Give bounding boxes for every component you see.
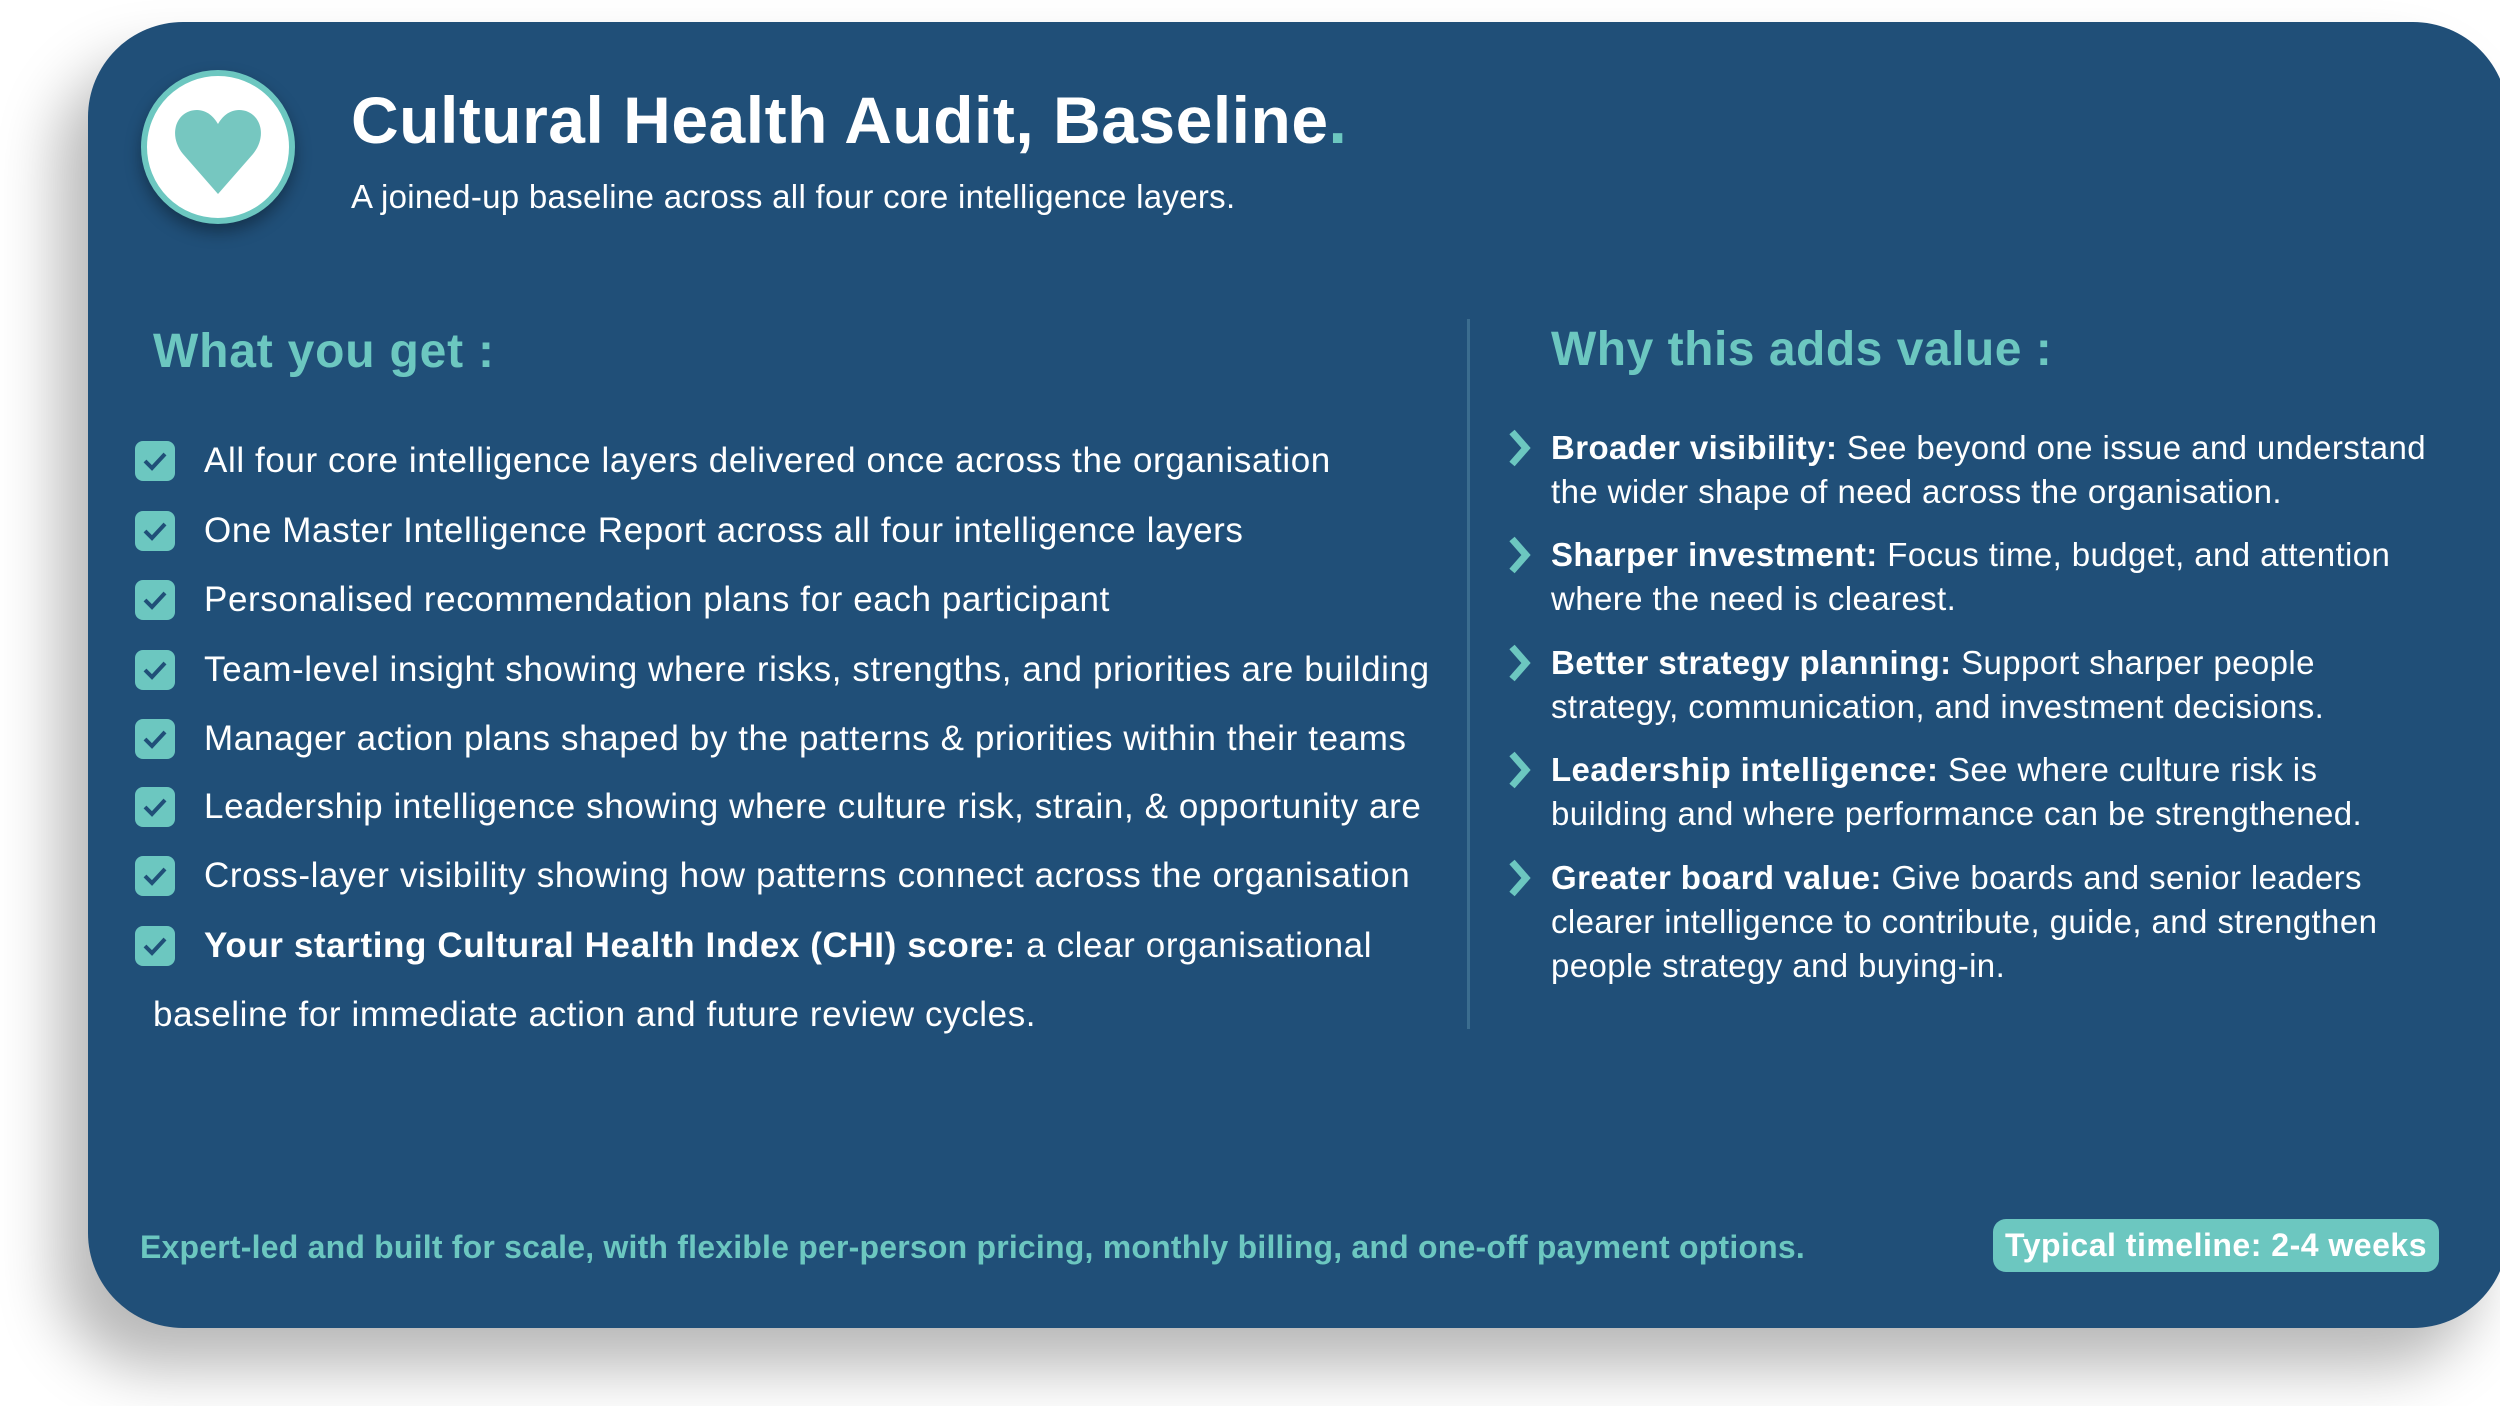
value list: Sharper investment: Focus time, budget, and attention where the need is clearest. xyxy=(1551,536,2390,617)
item 1 xyxy=(135,441,1331,481)
heading: why this adds value: Why this adds value : xyxy=(1551,323,2052,376)
value 4 xyxy=(1510,751,2362,832)
checklist: Team-level insight showing where risks, strengths, and priorities are building xyxy=(204,650,1430,689)
item 4 xyxy=(135,650,1430,690)
value list: Better strategy planning: Support sharper people xyxy=(1551,644,2315,681)
heading: what you get: What you get : xyxy=(153,325,495,378)
badge: timeline: Typical timeline: 2-4 weeks xyxy=(2005,1227,2427,1263)
value 5 xyxy=(1510,859,2377,984)
checklist xyxy=(135,441,1430,1034)
value list: building and where performance can be strengthened. xyxy=(1551,795,2362,832)
checklist: One Master Intelligence Report across all four intelligence layers xyxy=(204,511,1244,550)
value list: Greater board value: Give boards and senior leaders clearer intelligence to contribute, guide, and strengthen people strategy and buying-in. xyxy=(1551,859,2377,984)
checklist: Cross-layer visibility showing how patterns connect across the organisation xyxy=(204,856,1410,895)
title: Cultural Health Audit, Baseline. xyxy=(351,83,1347,157)
value list: Broader visibility: See beyond one issue and understand the wider shape of need across the organisation. xyxy=(1551,429,2426,510)
item 2 xyxy=(135,511,1244,551)
checklist: Your starting Cultural Health Index (CHI) score: a clear organisational xyxy=(204,926,1372,965)
checklist: baseline for immediate action and future review cycles. xyxy=(153,995,1036,1034)
value list xyxy=(1510,429,2426,984)
value list: Leadership intelligence: See where culture risk is xyxy=(1551,751,2317,788)
item 3 xyxy=(135,580,1110,620)
item 8 xyxy=(135,926,1372,1034)
value list: strategy, communication, and investment decisions. xyxy=(1551,688,2324,725)
value 3 xyxy=(1510,644,2324,725)
value 1 xyxy=(1510,429,2426,510)
item 7 xyxy=(135,856,1410,896)
checklist: All four core intelligence layers delivered once across the organisation xyxy=(204,441,1331,480)
subtitle: A joined-up baseline across all four core intelligence layers. xyxy=(351,178,1235,215)
badge: timeline xyxy=(1993,1219,2439,1272)
checklist: Leadership intelligence showing where culture risk, strain, & opportunity are xyxy=(204,787,1421,826)
checklist: Personalised recommendation plans for each participant xyxy=(204,580,1110,619)
item 5 xyxy=(135,719,1407,759)
icon: heart circle xyxy=(141,70,295,224)
footer text: Expert-led and built for scale, with flexible per-person pricing, monthly billing, and one-off payment options. xyxy=(140,1229,1805,1265)
divider xyxy=(1467,319,1470,1029)
value 2 xyxy=(1510,536,2390,617)
checklist: Manager action plans shaped by the patterns & priorities within their teams xyxy=(204,719,1407,758)
item 6 xyxy=(135,787,1421,827)
